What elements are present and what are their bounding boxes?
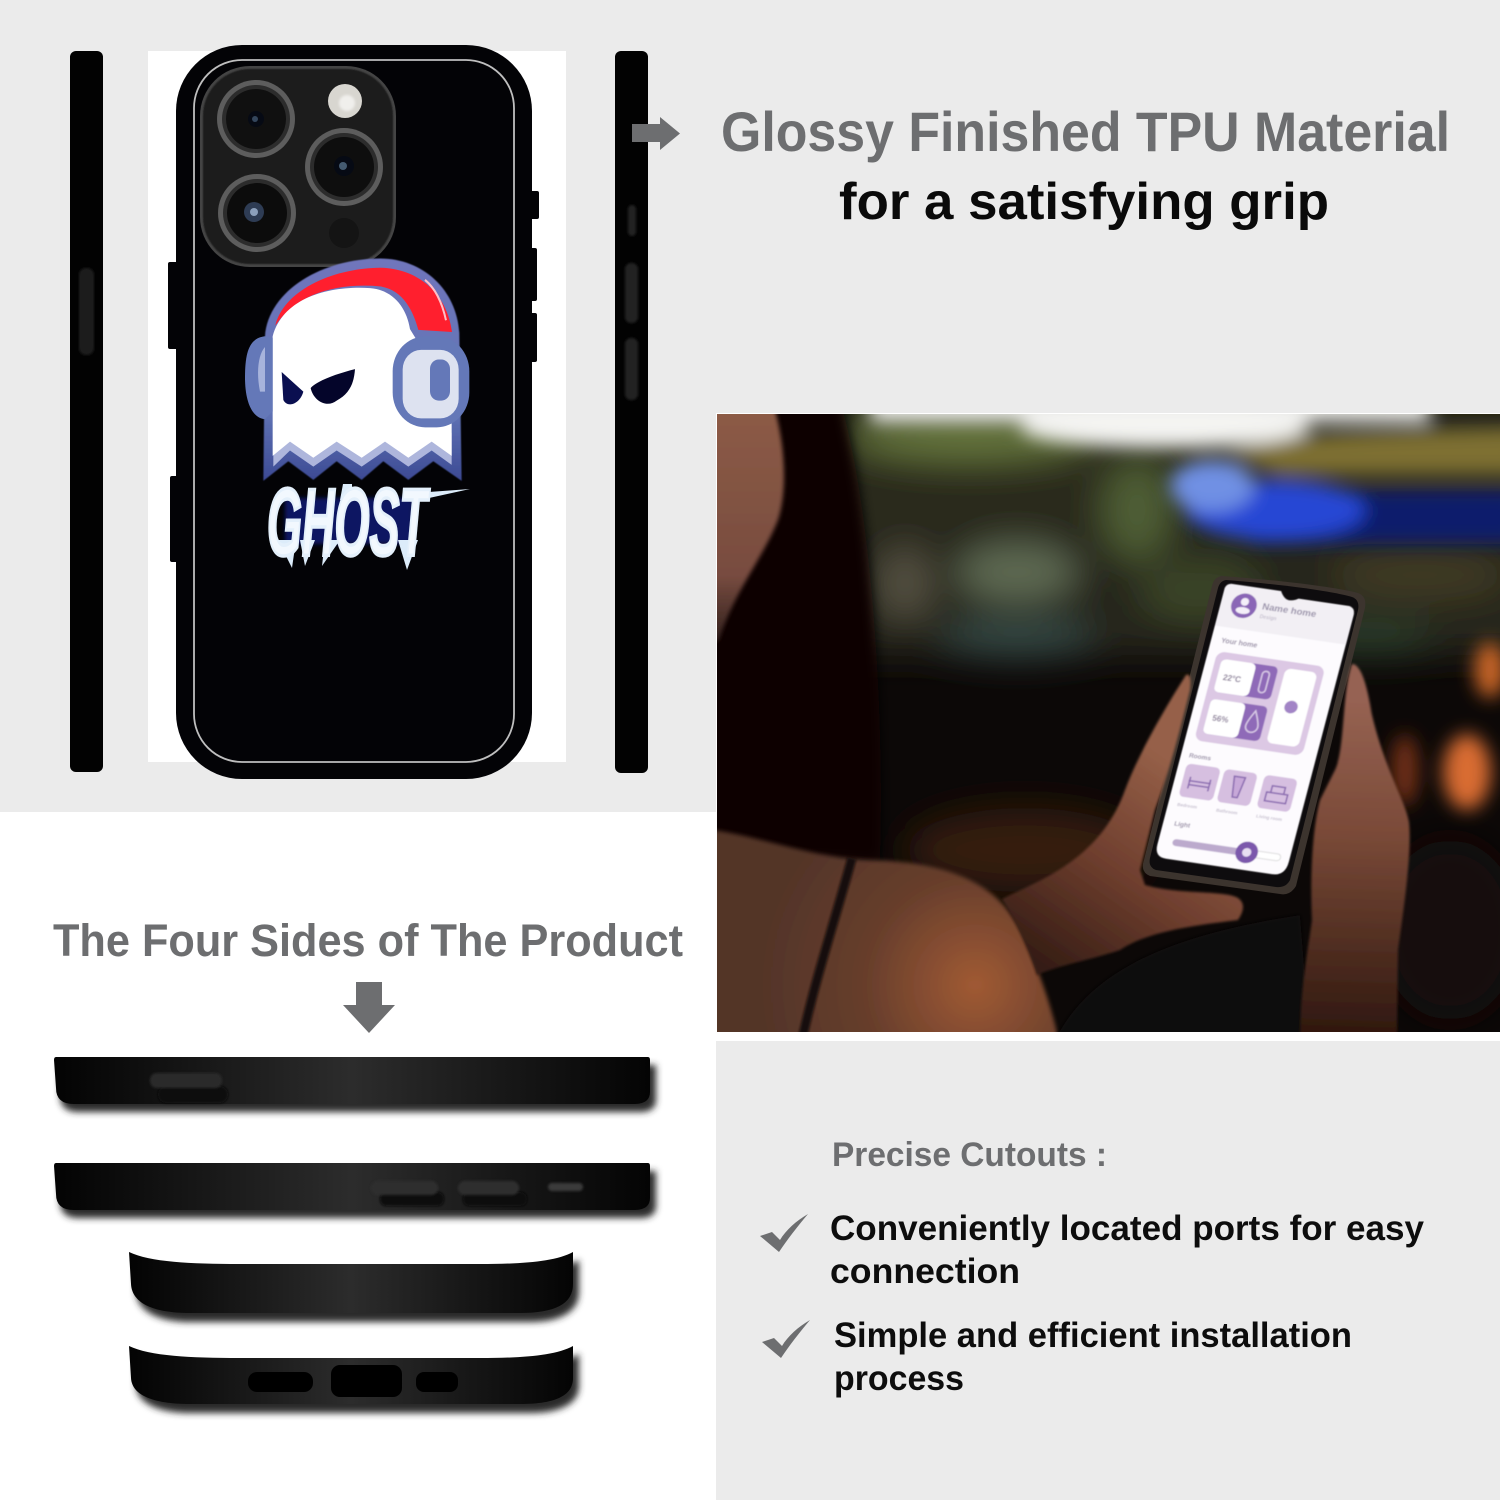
heading: glossy finish: Glossy Finished TPU Material (721, 100, 1450, 163)
white backdrop behind case (148, 51, 566, 762)
case body (176, 45, 532, 779)
smartphone screen app UI: Living room (1256, 814, 1283, 822)
text: ports benefit: connection (830, 1252, 1020, 1291)
icon: down arrow (343, 982, 395, 1033)
dark clothing below hands (1057, 1030, 1060, 1032)
face edge (717, 414, 787, 643)
ghost logo wordmark (267, 469, 470, 576)
smartphone screen app UI: Rooms (1188, 753, 1212, 763)
smartphone screen app UI: Design (1259, 614, 1277, 622)
smartphone screen app UI: Light (1173, 821, 1192, 830)
blurred person: hair (796, 414, 880, 678)
photo: hands holding smartphone (700, 396, 1500, 1045)
panel: lower end view with port cutouts (129, 1346, 579, 1413)
blurred landscape background (820, 400, 1500, 1020)
panel: left side view of case (70, 51, 103, 772)
smartphone screen app UI: Bedroom (1177, 802, 1198, 810)
text: ports benefit: Conveniently located ports for easy (830, 1209, 1425, 1248)
smartphone body (1143, 576, 1365, 894)
heading: four sides: The Four Sides of The Product (53, 915, 683, 966)
smartphone screen app UI: Your home (1220, 638, 1258, 650)
icon: check mark one (760, 1214, 808, 1252)
smartphone screen app UI (1154, 583, 1357, 876)
smartphone screen app UI: 22°C (1222, 673, 1242, 685)
text: installation benefit: process (834, 1359, 964, 1398)
panel: volume edge view (54, 1163, 656, 1218)
panel: top edge view (54, 1057, 656, 1112)
smartphone screen app UI: Bathroom (1216, 808, 1238, 816)
icon: ghost with headphones logo (245, 258, 469, 481)
ghost logo wordmark: GHOST (267, 469, 430, 576)
icon: camera module (200, 66, 396, 267)
smartphone screen app UI: Name home (1261, 602, 1318, 620)
case inner rim line (194, 60, 514, 762)
icon: side buttons of case (168, 191, 539, 562)
text: installation benefit: Simple and efficient installation (834, 1316, 1352, 1355)
left hand (1002, 675, 1243, 975)
smartphone bezel (1150, 580, 1358, 887)
shoulder (717, 828, 1059, 1032)
panel: upper end view (129, 1252, 579, 1322)
shoulder strap (802, 858, 852, 1040)
right hand (1300, 664, 1410, 1040)
panel: right side view of case (615, 51, 648, 773)
icon: right arrow (632, 117, 680, 150)
heading: precise cutouts: Precise Cutouts : (832, 1136, 1107, 1174)
subheading: satisfying grip: for a satisfying grip (839, 173, 1329, 231)
smartphone screen app UI: 56% (1211, 714, 1229, 725)
panel: phone case back view (148, 45, 566, 779)
icon: check mark two (762, 1320, 810, 1358)
